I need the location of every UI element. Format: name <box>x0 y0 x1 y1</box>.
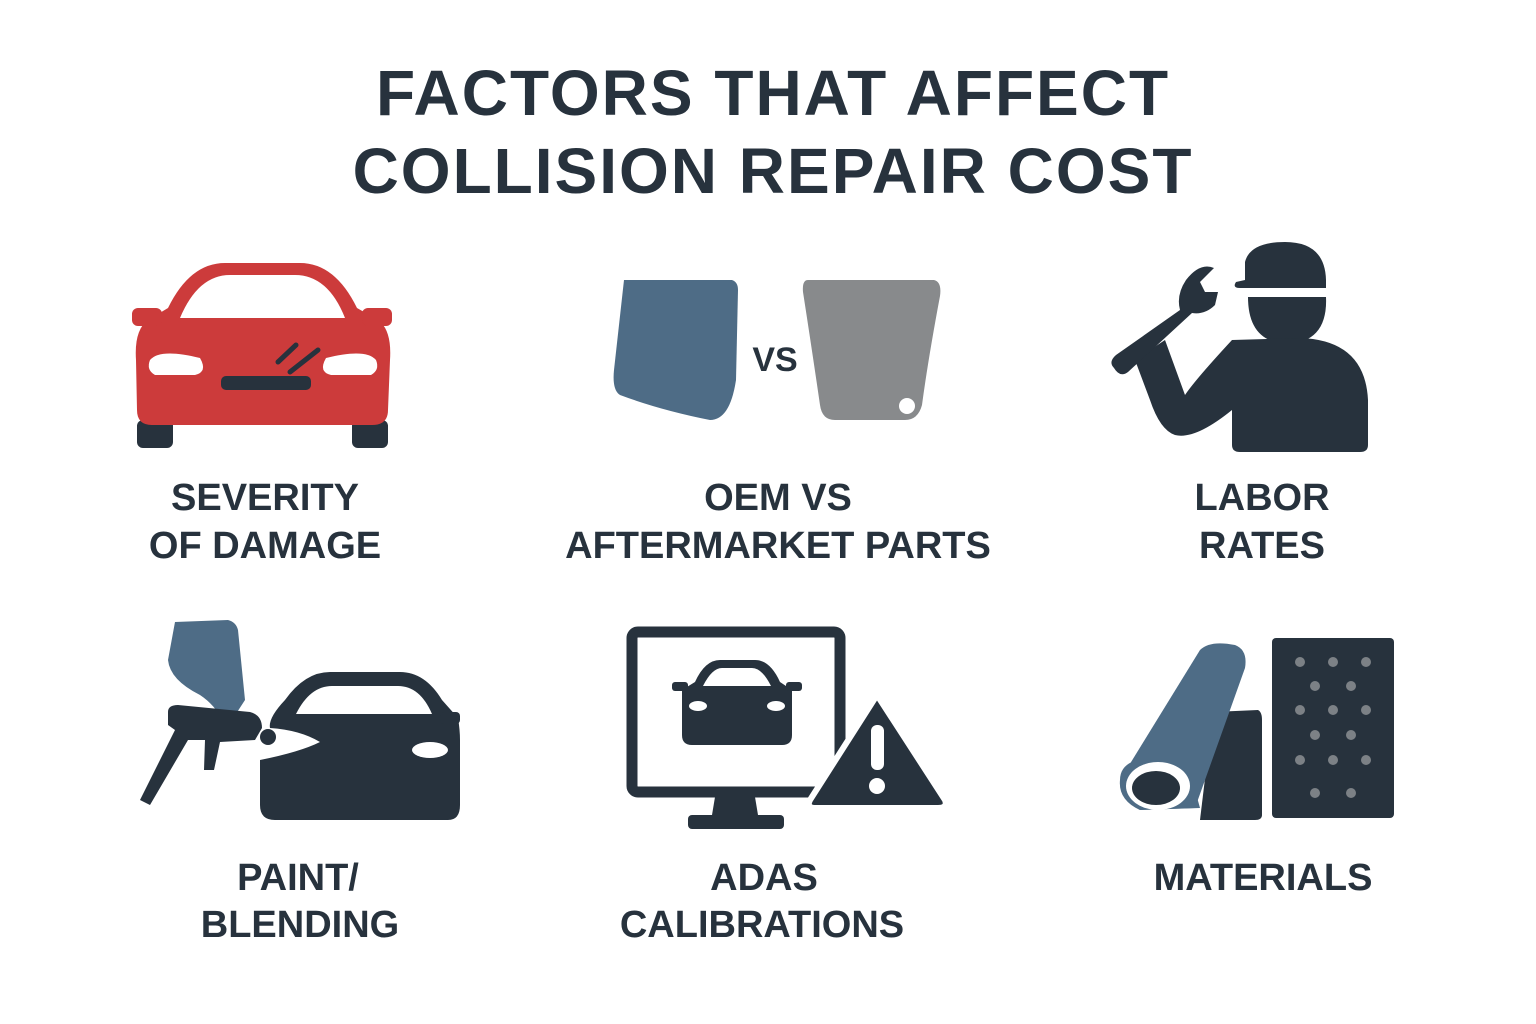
label: materials: MATERIALS <box>1154 857 1372 899</box>
label: paint/blending: BLENDING <box>201 904 399 946</box>
icon: mechanic with wrench <box>1111 242 1368 452</box>
label: ADAS calibrations <box>620 857 904 946</box>
label: severity of damage: OF DAMAGE <box>149 525 381 567</box>
title <box>353 57 1193 207</box>
label: OEM vs aftermarket parts: AFTERMARKET PARTS <box>565 525 991 567</box>
label: labor rates: RATES <box>1199 525 1325 567</box>
label: paint/blending <box>201 857 399 946</box>
icon: OEM vs aftermarket panels <box>614 280 940 420</box>
label: labor rates: LABOR <box>1194 477 1330 519</box>
label: severity of damage <box>149 477 381 567</box>
label: OEM vs aftermarket parts: OEM VS <box>704 477 852 519</box>
label: ADAS calibrations: CALIBRATIONS <box>620 904 904 946</box>
label: labor rates <box>1194 477 1330 567</box>
label: OEM vs aftermarket parts <box>565 477 991 567</box>
icon: monitor with car and warning <box>632 632 946 829</box>
label: paint/blending: PAINT/ <box>237 857 359 899</box>
icon: damaged red car <box>132 263 392 448</box>
label: severity of damage: SEVERITY <box>171 477 359 519</box>
icon: spray gun and car <box>140 620 460 820</box>
title: COLLISION REPAIR COST <box>353 135 1193 207</box>
title: FACTORS THAT AFFECT <box>376 57 1170 129</box>
label: ADAS calibrations: ADAS <box>710 857 818 899</box>
icon: OEM vs aftermarket panels: VS <box>752 341 798 379</box>
icon: materials roll and sandpaper <box>1120 638 1394 820</box>
